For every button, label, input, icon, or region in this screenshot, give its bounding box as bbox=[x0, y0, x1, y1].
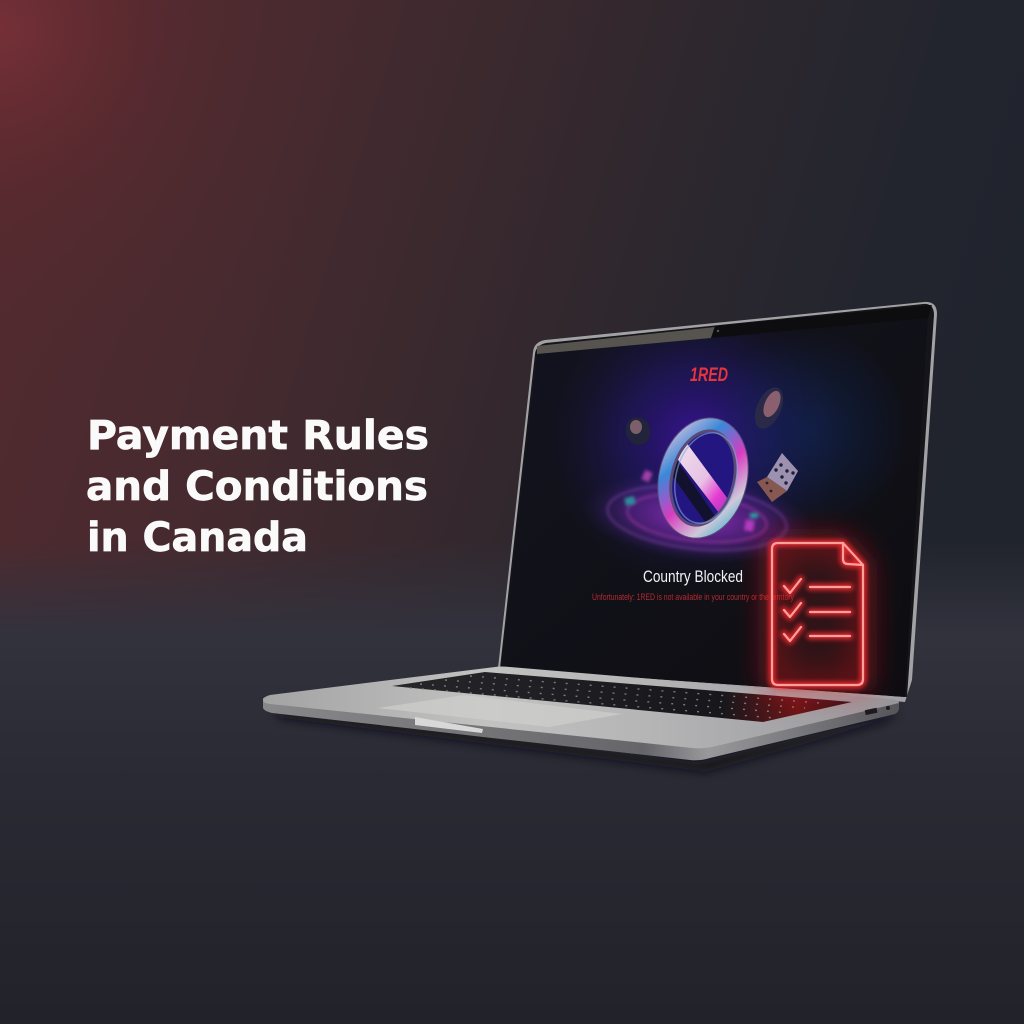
icon: top chip bbox=[749, 383, 789, 433]
icon: prohibition ring bbox=[653, 415, 753, 541]
screen bbox=[501, 318, 928, 697]
title: and Conditions bbox=[86, 464, 428, 510]
brand logo: 1RED bbox=[690, 365, 728, 386]
top bezel strip bbox=[537, 327, 715, 354]
trackpad bbox=[378, 695, 622, 727]
camera notch bbox=[711, 305, 932, 338]
small floating gems bbox=[624, 470, 758, 532]
swirl platform bbox=[577, 462, 817, 574]
title: in Canada bbox=[87, 515, 308, 561]
laptop shadow bbox=[275, 708, 900, 772]
screen message: Unfortunately: 1RED is not available in your country or the territory bbox=[592, 592, 794, 602]
neon glow bbox=[772, 543, 863, 685]
ports bbox=[865, 706, 890, 715]
screen heading: Country Blocked bbox=[643, 567, 743, 586]
laptop lid bbox=[498, 302, 937, 702]
icon: neon checklist document bbox=[772, 543, 863, 685]
icon: left chip bbox=[622, 414, 654, 448]
document outline bbox=[772, 543, 863, 685]
title bbox=[86, 413, 429, 561]
front notch bbox=[415, 717, 483, 733]
icon: dice bbox=[757, 453, 798, 502]
laptop bbox=[263, 302, 937, 772]
keyboard bbox=[392, 672, 852, 722]
laptop base bbox=[263, 666, 899, 760]
title: Payment Rules bbox=[87, 413, 429, 459]
